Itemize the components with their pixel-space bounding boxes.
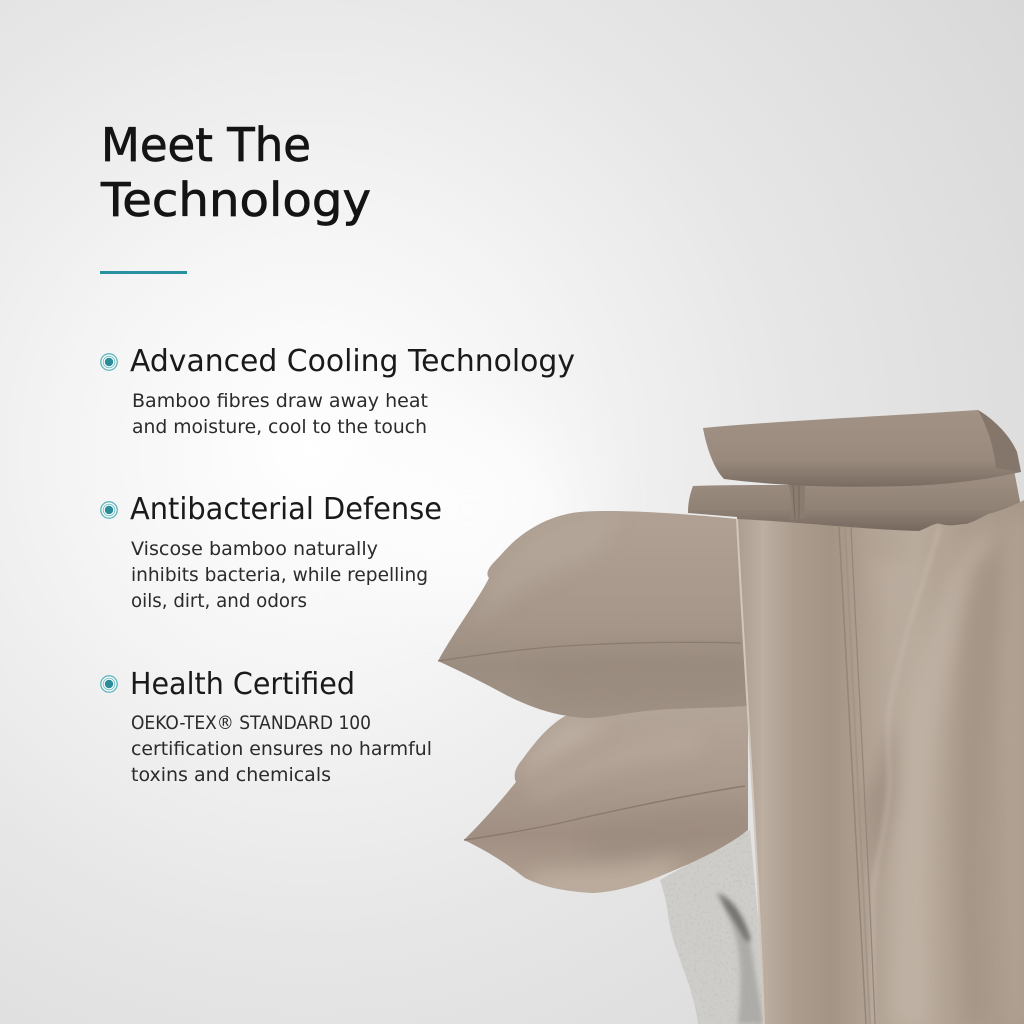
accent rule [100, 271, 187, 274]
heading: Antibacterial Defense [130, 492, 442, 527]
feature: advanced cooling technology [101, 344, 575, 438]
description: certification ensures no harmful [131, 738, 432, 760]
description: oils, dirt, and odors [131, 590, 307, 612]
description: and moisture, cool to the touch [132, 416, 427, 438]
description: Viscose bamboo naturally [131, 538, 378, 560]
title: Meet The [101, 118, 311, 172]
upper pillow [438, 511, 748, 718]
title: Technology [100, 173, 371, 227]
feature: health certified [101, 667, 432, 786]
sheet stitched band [839, 527, 866, 1024]
heading: Advanced Cooling Technology [130, 344, 575, 379]
draped sheet [737, 500, 1024, 1024]
description: Bamboo fibres draw away heat [132, 390, 428, 412]
feature: antibacterial defense [101, 492, 442, 612]
icon: concentric teal circle [101, 502, 117, 518]
description [131, 538, 428, 612]
upper fold [703, 410, 1021, 487]
product image: bedding on stone [438, 410, 1024, 1024]
description: OEKO-TEX® STANDARD 100 [131, 712, 371, 734]
description: toxins and chemicals [131, 764, 331, 786]
folded sheets [688, 410, 1022, 540]
icon: concentric teal circle [101, 354, 117, 370]
stone pedestal [660, 830, 768, 1024]
heading: Health Certified [130, 667, 355, 702]
title [100, 118, 371, 227]
drape edge highlight [874, 742, 891, 891]
light hem edge [737, 519, 764, 1024]
lower fold [688, 470, 1022, 540]
pillow seam [464, 786, 745, 840]
description [131, 712, 432, 786]
description [132, 390, 428, 438]
pillow seam [438, 642, 741, 661]
icon: concentric teal circle [101, 676, 117, 692]
lower pillow [464, 700, 748, 900]
description: inhibits bacteria, while repelling [131, 564, 428, 586]
